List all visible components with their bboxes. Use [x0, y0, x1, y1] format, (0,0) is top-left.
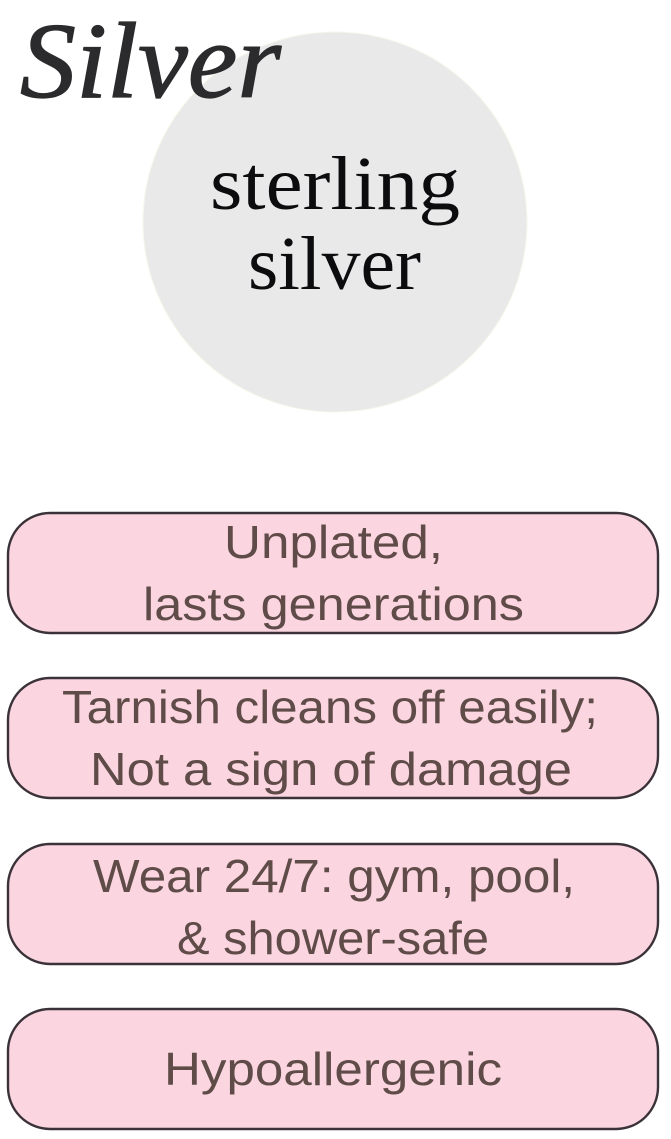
circle badge: sterling silver — [143, 32, 527, 412]
pill: tarnish — [8, 678, 658, 798]
pill: unplated: lasts generations — [143, 578, 524, 630]
circle label: silver — [248, 222, 421, 306]
pill: hypoallergenic: Hypoallergenic — [164, 1043, 502, 1095]
pill: wear 24/7: Wear 24/7: gym, pool, — [93, 850, 575, 902]
circle label — [210, 142, 460, 306]
pill: wear 24/7: & shower-safe — [177, 912, 489, 964]
pill: tarnish: Tarnish cleans off easily; — [62, 681, 598, 733]
circle label: sterling — [210, 142, 460, 226]
title: Silver — [20, 2, 282, 121]
pill: hypoallergenic — [8, 1009, 658, 1129]
pill: unplated: Unplated, — [224, 516, 443, 568]
pill: wear 24/7 — [8, 844, 658, 964]
pill: tarnish: Not a sign of damage — [90, 743, 572, 795]
pill: unplated — [8, 513, 658, 633]
